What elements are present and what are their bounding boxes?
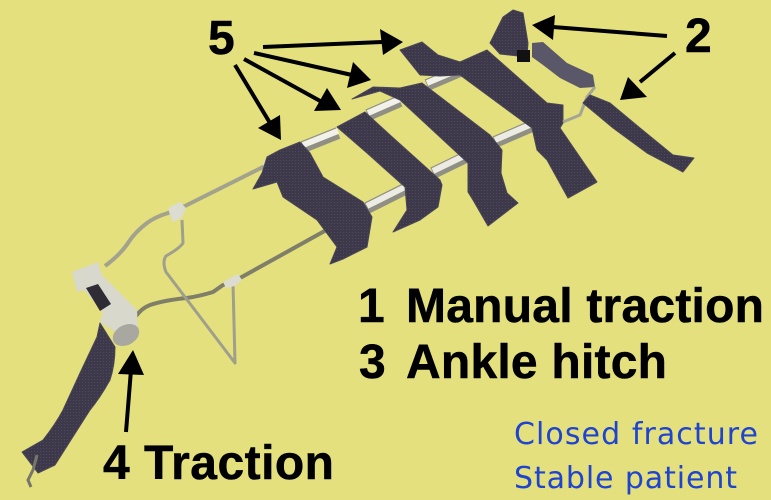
strap 2 [337, 112, 442, 232]
arrow: 4 to traction knob [118, 350, 144, 432]
lower left strap with hook [22, 323, 115, 487]
label 1: 1 [358, 280, 385, 333]
strap 3 [352, 83, 518, 226]
strap 4 [400, 42, 597, 198]
strap 1 [253, 142, 372, 264]
arrow: 2 to footplate [532, 15, 667, 40]
arrows [118, 15, 675, 432]
thin frame rods [105, 165, 330, 363]
frame clips [168, 160, 334, 288]
label 3: 3 [359, 336, 386, 389]
ankle strap right [583, 95, 694, 172]
arrow: 5 to strap 3 [254, 53, 371, 88]
label: 4 traction: 4 Traction [103, 437, 334, 490]
black buckle [517, 50, 530, 62]
arrow: 5 to strap 1 [235, 65, 281, 140]
footplate [490, 10, 528, 57]
label: ankle hitch: Ankle hitch [406, 336, 667, 389]
arrow: 5 to strap 4 [263, 29, 403, 55]
label 2: 2 [685, 10, 712, 63]
note: stable patient: Stable patient [514, 461, 737, 496]
note: closed fracture: Closed fracture [514, 417, 758, 452]
arrow: 5 to strap 2 [244, 59, 341, 111]
traction mechanism block [72, 262, 143, 350]
arrow: 2 to ankle strap [620, 53, 675, 100]
label 5: 5 [208, 12, 235, 65]
small wire loop [563, 87, 595, 122]
label: manual traction: Manual traction [406, 280, 764, 333]
thick side rods [303, 69, 532, 208]
gray padded tube [532, 42, 595, 88]
